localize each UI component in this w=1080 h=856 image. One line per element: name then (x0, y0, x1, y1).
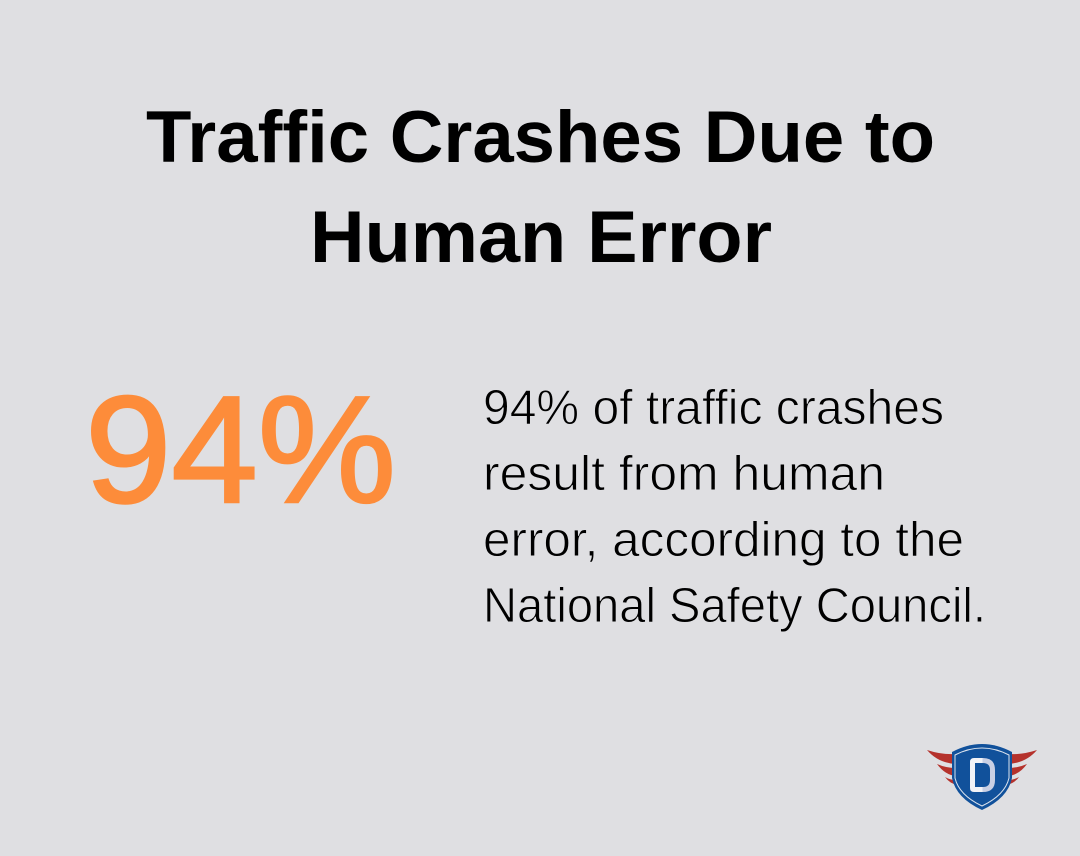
description text: National Safety Council. (483, 579, 986, 633)
icon: letter D (970, 758, 995, 792)
description text (483, 381, 986, 633)
title: Traffic Crashes Due to (146, 97, 935, 178)
icon: shield logo with wings (927, 744, 1037, 810)
icon: shield (952, 744, 1012, 810)
description text: 94% of traffic crashes (483, 381, 944, 435)
title (146, 97, 935, 278)
icon: left wing (927, 750, 958, 785)
description text: error, according to the (483, 513, 964, 567)
icon: right wing (1006, 750, 1037, 785)
big statistic: 94%: 94% (85, 365, 396, 535)
description text: result from human (483, 447, 885, 501)
title: Human Error (310, 197, 772, 278)
